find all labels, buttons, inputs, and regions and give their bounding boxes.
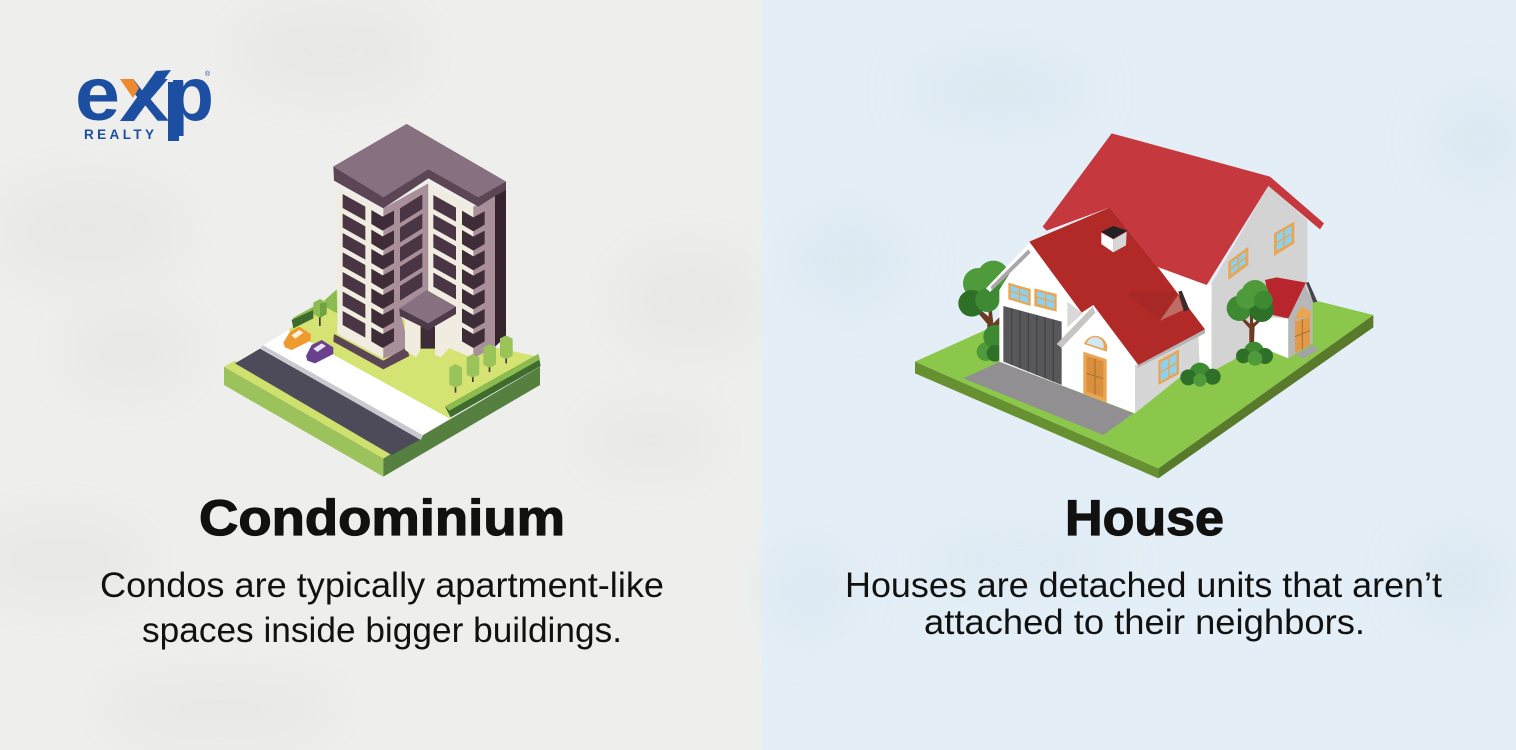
garage door xyxy=(1003,306,1062,385)
text: house description xyxy=(845,566,1442,642)
front hedge xyxy=(445,354,541,417)
text: condominium description: spaces inside bigger buildings. xyxy=(142,611,622,650)
front door xyxy=(1083,336,1107,403)
text: house description: Houses are detached units that aren’t xyxy=(845,566,1442,605)
text: condominium description: Condos are typically apartment-like xyxy=(100,566,664,605)
logo: eXp Realty: e xyxy=(75,52,120,137)
trees xyxy=(449,335,513,393)
windows xyxy=(343,194,485,348)
panel: condominium background xyxy=(0,0,762,750)
wing roof and eaves xyxy=(986,207,1205,368)
bushes xyxy=(1180,342,1273,387)
chimney xyxy=(1101,226,1127,252)
lawn block xyxy=(915,300,1373,478)
main roof xyxy=(1043,133,1324,285)
wing windows xyxy=(1008,283,1179,385)
back tree and bush xyxy=(958,261,1009,362)
front wing walls xyxy=(999,243,1199,413)
building plinth xyxy=(333,334,409,369)
logo: eXp Realty: ® xyxy=(205,70,211,78)
illustration: house xyxy=(915,133,1373,478)
front tree xyxy=(1227,280,1274,344)
text: condominium description xyxy=(100,566,664,650)
logo: eXp Realty: x xyxy=(122,52,168,137)
back hedge and tree xyxy=(292,289,337,328)
side porch xyxy=(1253,277,1319,359)
cars xyxy=(283,327,333,363)
text: house description: attached to their neighbors. xyxy=(924,603,1365,642)
panel: house background xyxy=(762,0,1516,750)
heading: House: House xyxy=(1065,490,1224,546)
logo: eXp Realty: p xyxy=(168,52,214,137)
heading: Condominium: Condominium xyxy=(199,490,565,546)
ground block xyxy=(224,290,540,477)
logo: eXp Realty xyxy=(75,52,214,142)
entrance canopy xyxy=(399,290,456,357)
upper walls xyxy=(1157,186,1307,372)
roof xyxy=(333,124,506,208)
building walls xyxy=(337,183,506,358)
logo: eXp Realty: REALTY xyxy=(84,127,157,142)
illustration: condominium building xyxy=(224,124,541,477)
upper windows xyxy=(1228,222,1294,280)
